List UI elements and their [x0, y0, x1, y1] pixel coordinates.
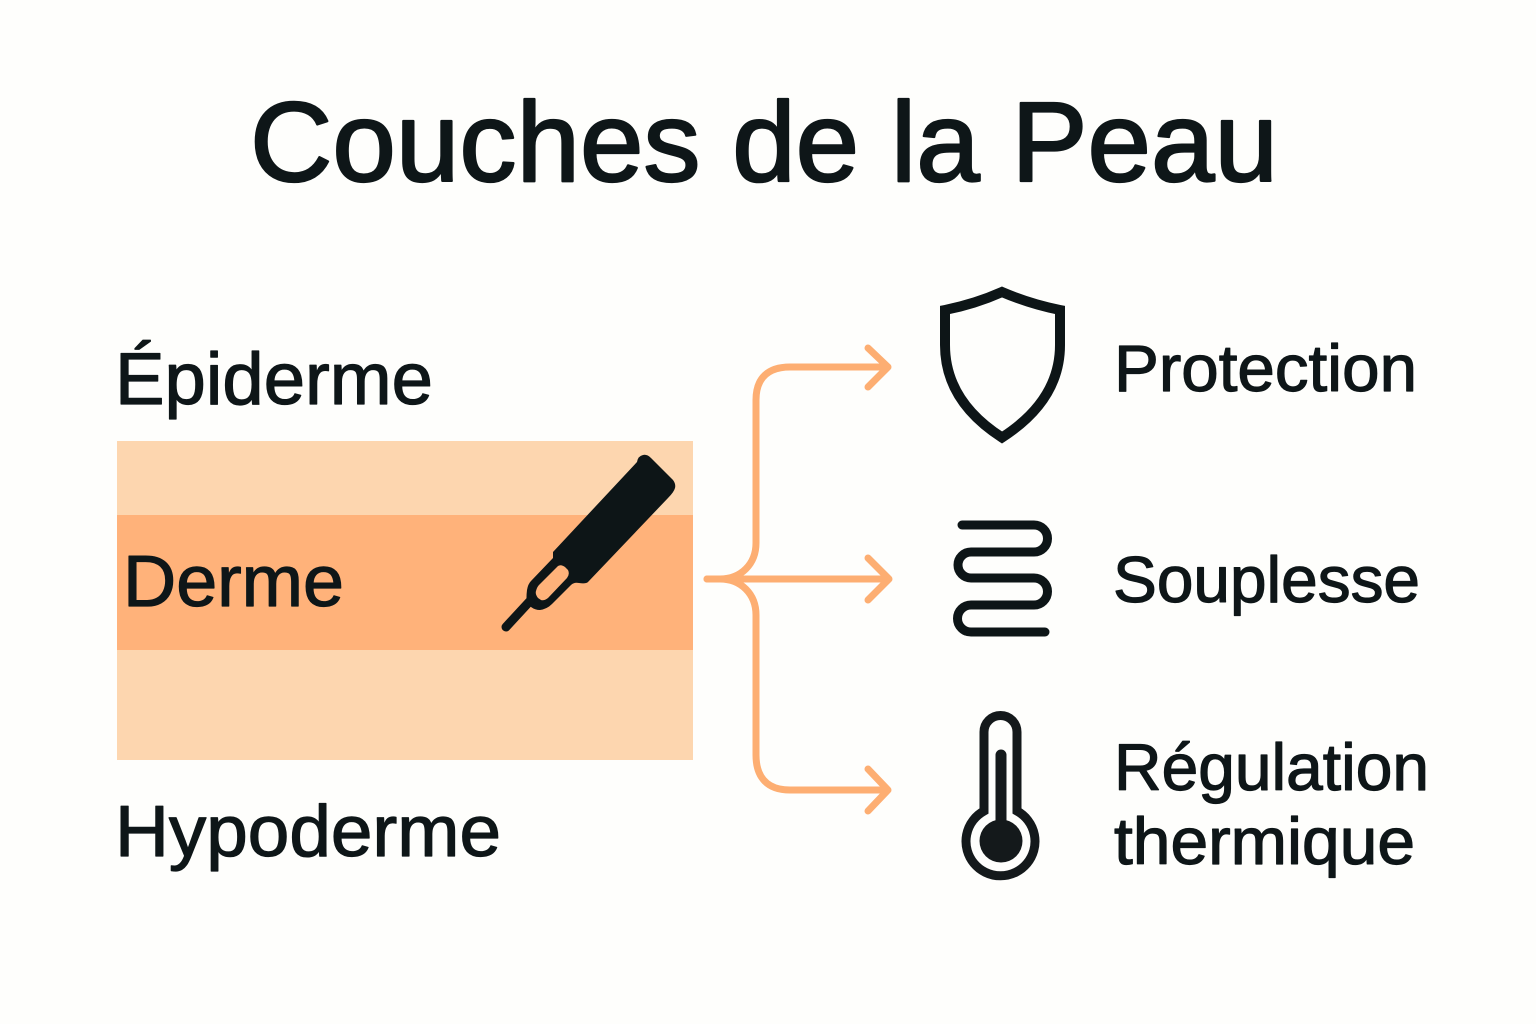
arrow: to Régulation thermique: [720, 579, 888, 811]
label: Régulation thermique: Régulation: [1114, 730, 1429, 804]
label: Derme: Derme: [123, 542, 344, 622]
layer: dermis band: [117, 515, 693, 650]
icon: shield: [945, 292, 1060, 438]
icon: thermometer: [966, 716, 1035, 876]
icon: syringe: [506, 455, 675, 627]
arrow: to Souplesse: [707, 558, 889, 600]
label: Régulation thermique: thermique: [1114, 804, 1415, 878]
label: Hypoderme: Hypoderme: [115, 792, 501, 872]
panel: skin layers diagram: [117, 441, 693, 760]
label: Épiderme: Épiderme: [115, 339, 433, 420]
layer: upper and lower skin band: [117, 441, 693, 760]
label: Régulation thermique: [1114, 730, 1429, 878]
arrows: branching connector to three functions: [707, 348, 889, 811]
icon: flexible zigzag: [958, 525, 1048, 632]
label: Protection: Protection: [1114, 331, 1417, 405]
title: Couches de la Peau: [250, 79, 1278, 205]
label: Souplesse: Souplesse: [1113, 543, 1420, 616]
arrow: to Protection: [707, 348, 888, 579]
